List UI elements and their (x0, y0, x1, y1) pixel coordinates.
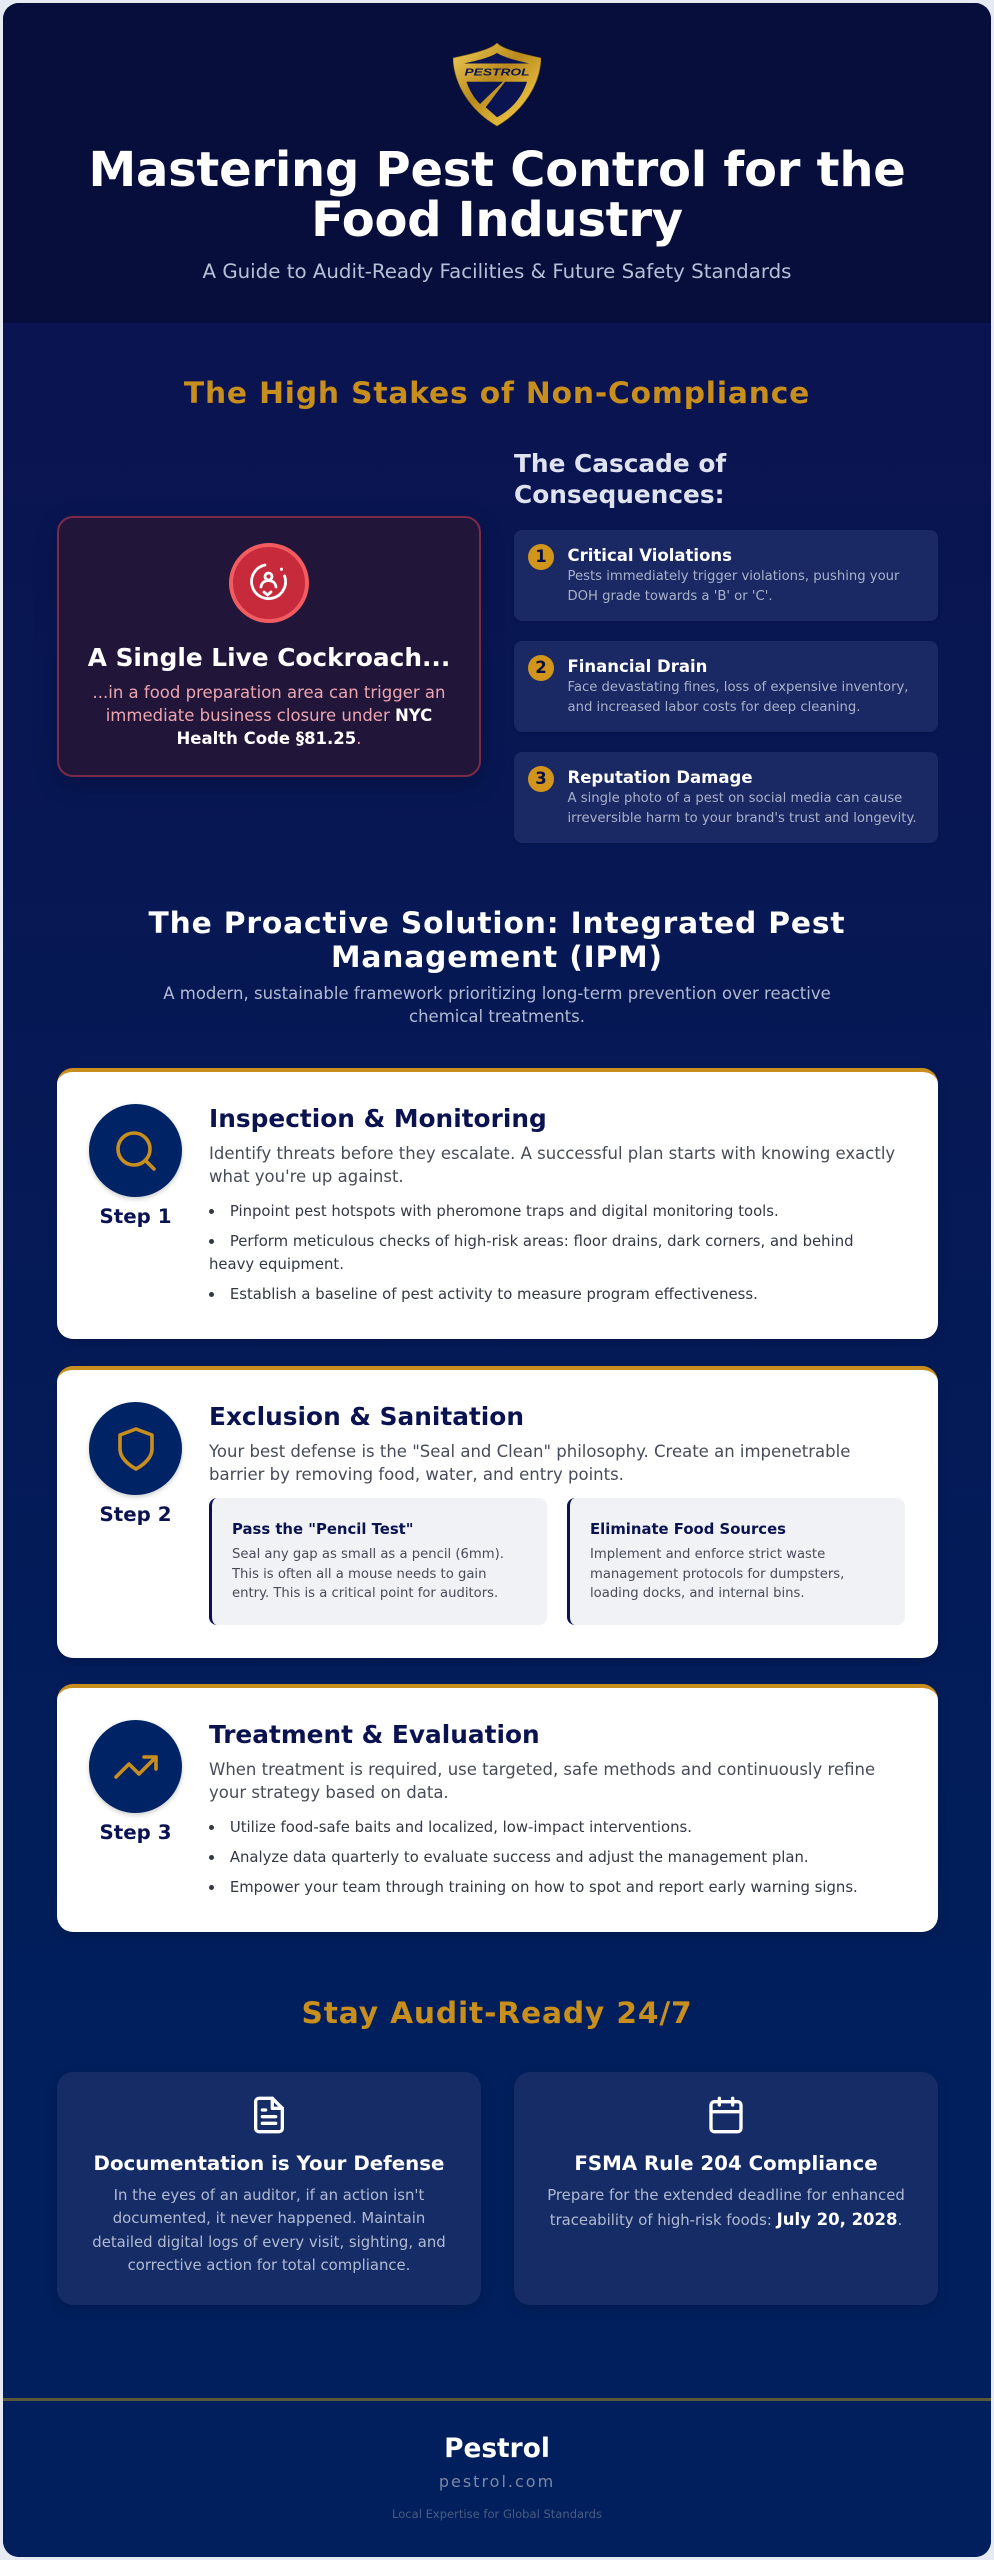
heading: high stakes: The High Stakes of Non-Compliance (184, 376, 810, 410)
number badge (528, 766, 554, 792)
card text: immediate business closure under NYC (106, 706, 432, 725)
icon: shield (89, 1402, 182, 1495)
item description: DOH grade towards a 'B' or 'C'. (568, 589, 773, 604)
panel: step 2 (57, 1366, 938, 1658)
card text: documented, it never happened. Maintain (113, 2209, 425, 2227)
item description: Face devastating fines, loss of expensive inventory, (568, 680, 908, 695)
icon: calendar (709, 2096, 743, 2134)
callout text: loading docks, and internal bins. (590, 1586, 805, 1601)
item description (568, 791, 917, 826)
step bullets: Empower your team through training on how to spot and report early warning signs. (230, 1878, 858, 1896)
step bullets: Analyze data quarterly to evaluate success and adjust the management plan. (230, 1848, 809, 1866)
card text: traceability of high-risk foods: July 20, 2028. (550, 2210, 902, 2229)
step description: barrier by removing food, water, and entry points. (209, 1465, 624, 1484)
callout: pencil test (209, 1498, 547, 1625)
step bullets (209, 1818, 858, 1896)
panel: FSMA rule 204 (514, 2072, 938, 2305)
heading: proactive solution: The Proactive Solution: Integrated Pest (149, 906, 845, 941)
step title: Treatment & Evaluation (209, 1720, 540, 1749)
step description (209, 1442, 850, 1484)
section intro: chemical treatments. (409, 1007, 585, 1026)
panel: cockroach warning (57, 516, 481, 777)
step bullets: Establish a baseline of pest activity to measure program effectiveness. (230, 1285, 758, 1303)
card text: ...in a food preparation area can trigger an (93, 683, 445, 702)
icon: magnifier (89, 1104, 182, 1197)
number badge (528, 655, 554, 681)
heading: proactive solution: Management (IPM) (331, 940, 663, 974)
item title: Reputation Damage (568, 768, 753, 787)
item description: and increased labor costs for deep cleaning. (568, 700, 860, 715)
heading: cascade of consequences (514, 449, 726, 509)
card title: Documentation is Your Defense (94, 2152, 444, 2175)
footer brand: Pestrol (444, 2432, 550, 2464)
card title: FSMA Rule 204 Compliance (574, 2152, 878, 2175)
card text (92, 2186, 446, 2274)
card text: corrective action for total compliance. (128, 2256, 410, 2274)
step bullets: heavy equipment. (209, 1255, 344, 1273)
step description: what you're up against. (209, 1167, 404, 1186)
footer url: pestrol.com (439, 2472, 555, 2491)
callout text (232, 1547, 504, 1601)
card text (93, 683, 445, 748)
item title: Financial Drain (568, 657, 707, 676)
step bullets: Perform meticulous checks of high-risk areas: floor drains, dark corners, and behind (230, 1232, 854, 1250)
heading: stay audit-ready: Stay Audit-Ready 24/7 (301, 1996, 693, 2031)
icon: cockroach alert (229, 543, 309, 623)
step description (209, 1760, 875, 1802)
card text (547, 2186, 905, 2229)
step label: Step 2 (100, 1503, 171, 1526)
number badge: 3 (535, 769, 547, 788)
callout text: Seal any gap as small as a pencil (6mm). (232, 1547, 504, 1562)
title: Mastering Pest Control for the (88, 142, 906, 198)
callout: food sources (567, 1498, 905, 1625)
step bullets: Utilize food-safe baits and localized, low-impact interventions. (230, 1818, 692, 1836)
step label: Step 1 (100, 1205, 171, 1228)
panel: documentation (57, 2072, 481, 2305)
section intro: A modern, sustainable framework prioritizing long-term prevention over reactive (163, 984, 831, 1003)
consequence 3 (514, 752, 938, 843)
icon: document (254, 2096, 284, 2134)
footer (3, 2398, 991, 2557)
card text: In the eyes of an auditor, if an action isn't (114, 2186, 424, 2204)
footer tagline: Local Expertise for Global Standards (392, 2507, 602, 2521)
step description (209, 1144, 895, 1186)
heading: cascade of consequences: Consequences: (514, 480, 725, 509)
item description: Pests immediately trigger violations, pushing your (568, 569, 899, 584)
panel: step 3 (57, 1684, 938, 1932)
consequence 1 (514, 530, 938, 621)
step description: your strategy based on data. (209, 1783, 449, 1802)
header band (3, 3, 991, 323)
title: Food Industry (311, 192, 683, 248)
heading: cascade of consequences: The Cascade of (514, 449, 726, 478)
consequence 2 (514, 641, 938, 732)
step bullets (209, 1202, 854, 1303)
item description (568, 569, 900, 604)
callout text: Implement and enforce strict waste (590, 1547, 825, 1562)
item description: A single photo of a pest on social media can cause (568, 791, 902, 806)
callout text (590, 1547, 844, 1601)
number badge: 1 (535, 547, 547, 566)
item description (568, 680, 908, 715)
card text: Health Code §81.25. (176, 729, 362, 748)
step bullets: Pinpoint pest hotspots with pheromone traps and digital monitoring tools. (230, 1202, 779, 1220)
logo: Pestrol shield (453, 43, 541, 126)
step description: Identify threats before they escalate. A successful plan starts with knowing exactly (209, 1144, 895, 1163)
card text: Prepare for the extended deadline for enhanced (547, 2186, 905, 2204)
number badge: 2 (535, 658, 547, 677)
subtitle: A Guide to Audit-Ready Facilities & Future Safety Standards (202, 260, 791, 283)
item title: Critical Violations (568, 546, 732, 565)
title (88, 142, 906, 248)
heading: proactive solution (148, 906, 845, 974)
panel: step 1 (57, 1068, 938, 1339)
callout title: Pass the "Pencil Test" (232, 1520, 414, 1538)
callout text: This is often all a mouse needs to gain (232, 1567, 486, 1582)
item description: irreversible harm to your brand's trust and longevity. (568, 811, 917, 826)
step title: Exclusion & Sanitation (209, 1402, 524, 1431)
step description: When treatment is required, use targeted, safe methods and continuously refine (209, 1760, 875, 1779)
callout text: management protocols for dumpsters, (590, 1567, 844, 1582)
number badge (528, 544, 554, 570)
icon: trending up (89, 1720, 182, 1813)
step title: Inspection & Monitoring (209, 1104, 547, 1133)
callout text: entry. This is a critical point for auditors. (232, 1586, 498, 1601)
card text: detailed digital logs of every visit, sighting, and (92, 2233, 446, 2251)
section intro (163, 984, 831, 1026)
callout title: Eliminate Food Sources (590, 1520, 786, 1538)
step label: Step 3 (100, 1821, 171, 1844)
logo: Pestrol shield: PESTROL (464, 67, 530, 79)
step description: Your best defense is the "Seal and Clean" philosophy. Create an impenetrable (209, 1442, 850, 1461)
card heading: A Single Live Cockroach... (88, 643, 450, 672)
